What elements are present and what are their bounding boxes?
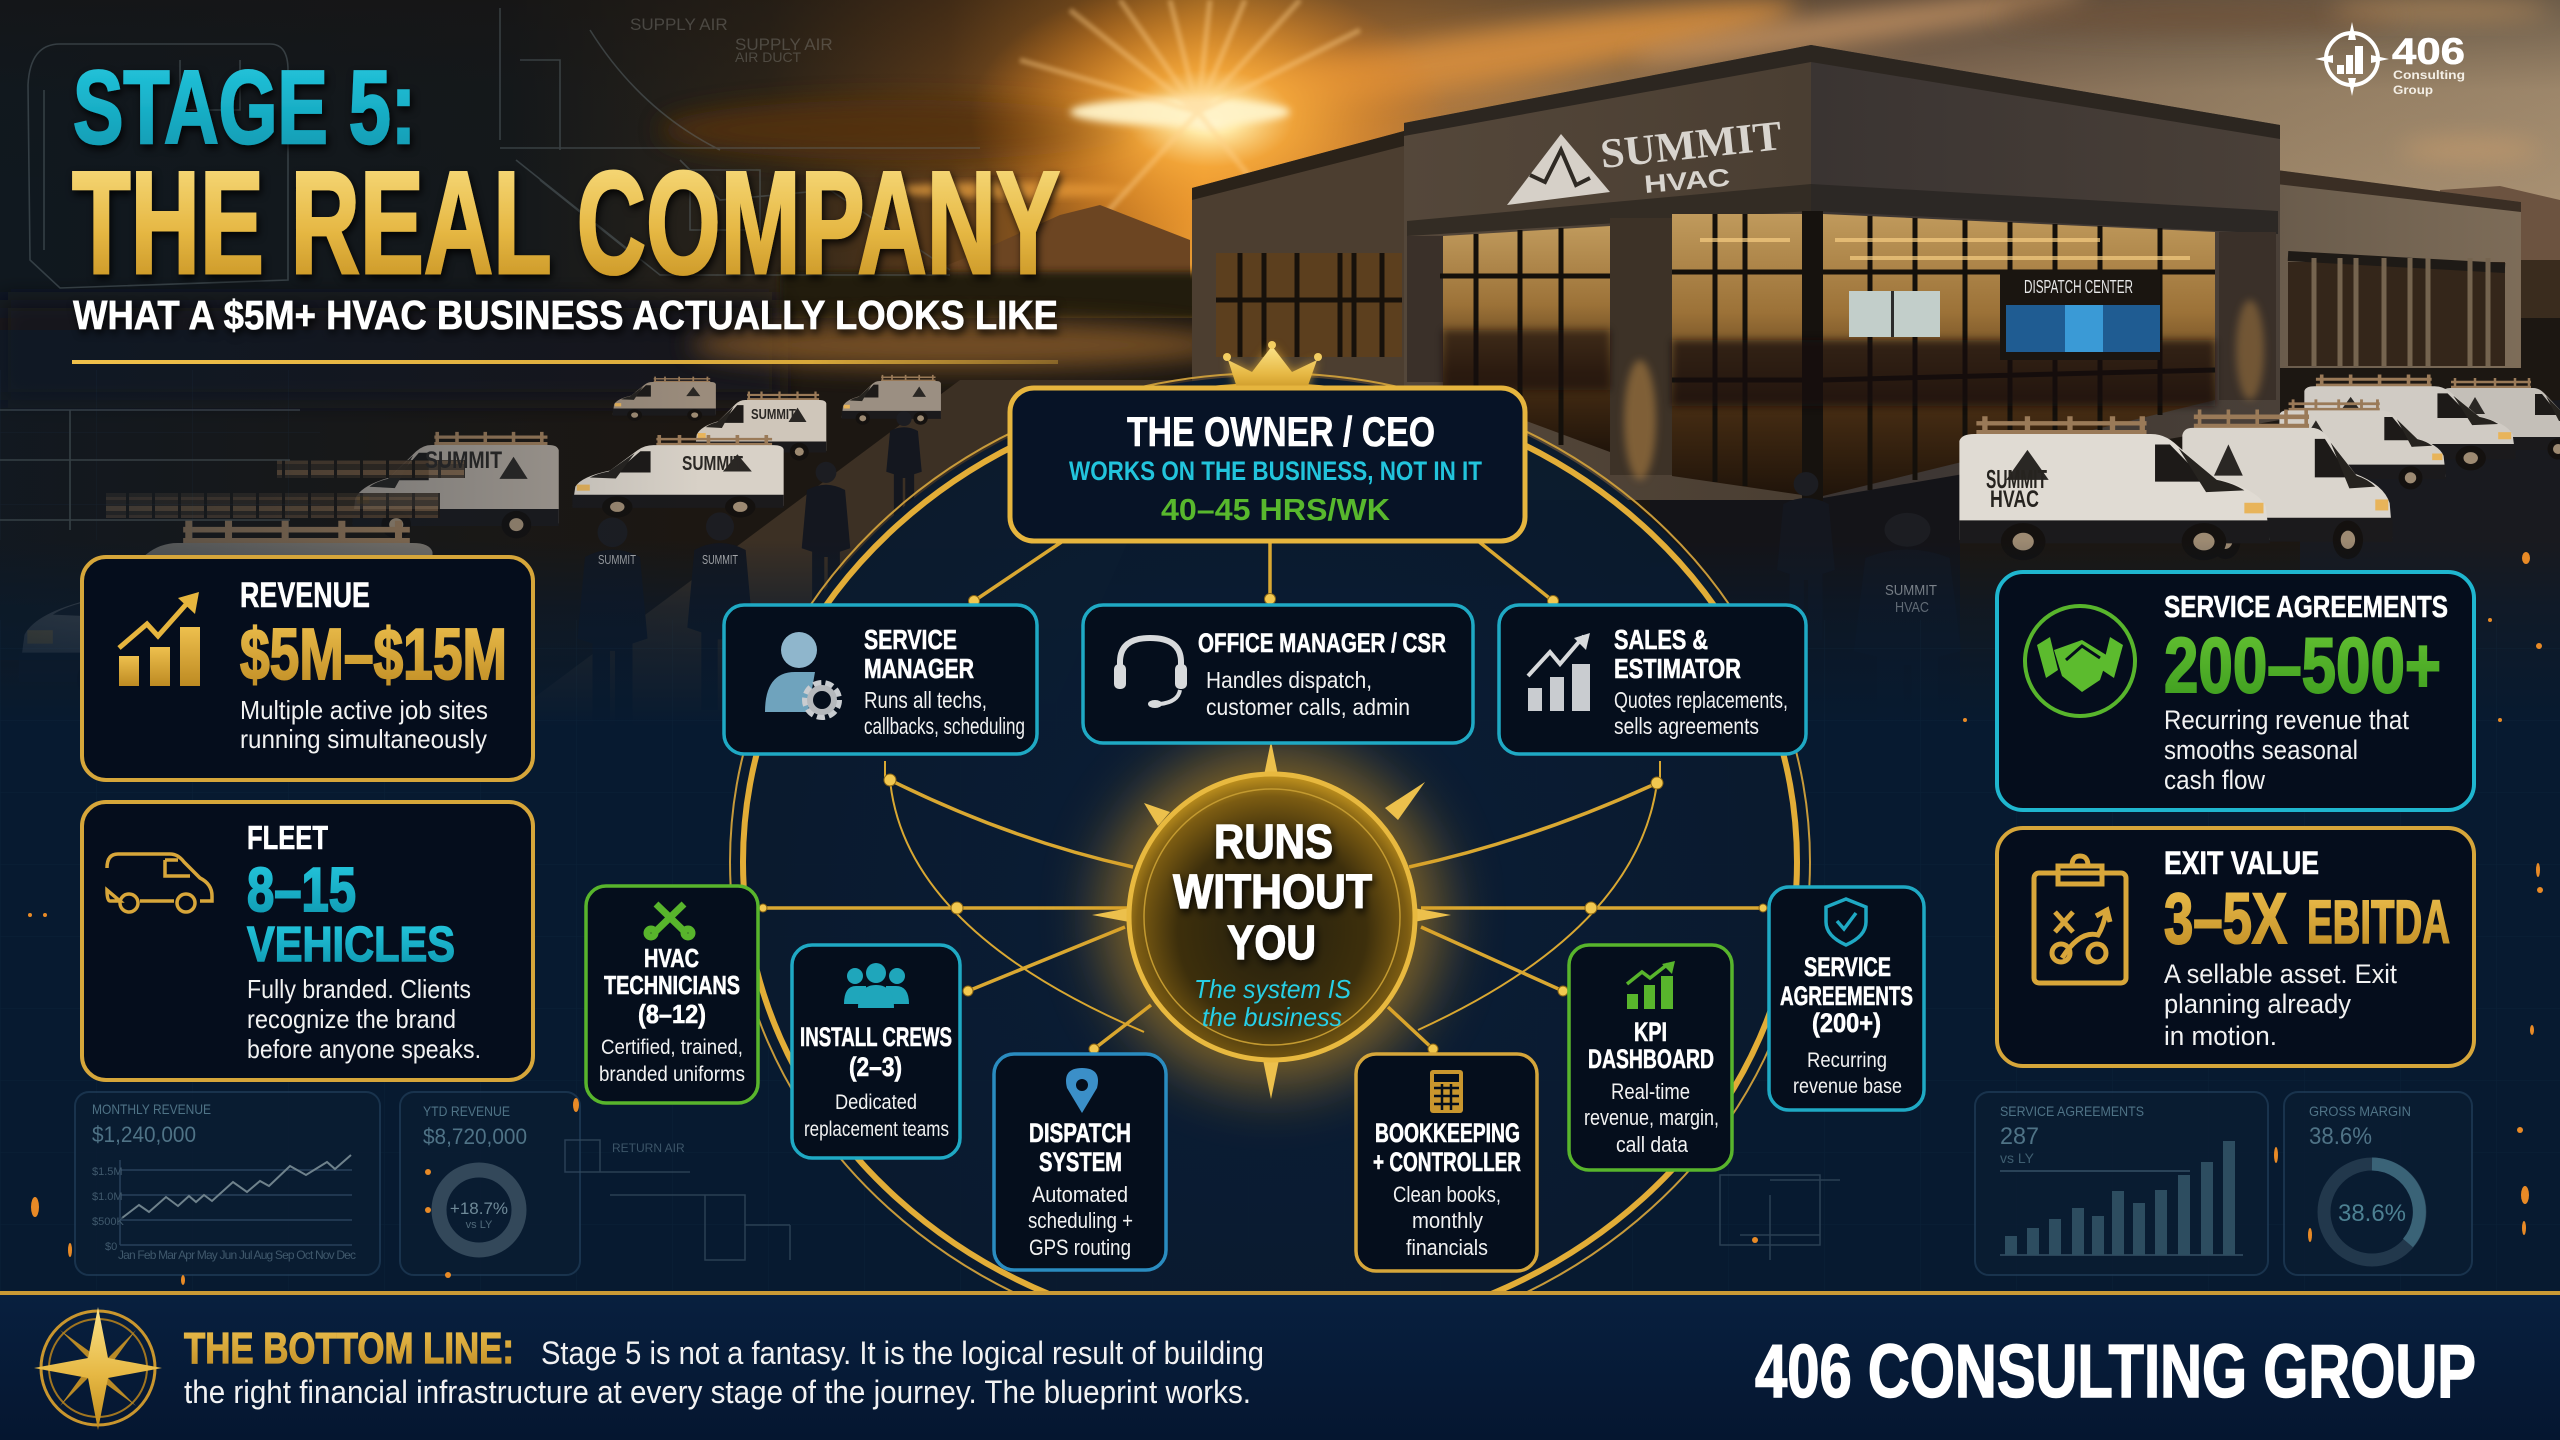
icon: wrenches (647, 904, 692, 937)
dashboard: gross margin: GROSS MARGIN (2309, 1103, 2411, 1119)
office screens (1849, 270, 2160, 360)
icon: van (107, 854, 212, 912)
panel: exit value: in motion. (2164, 1021, 2277, 1051)
node: install crews: Dedicated (835, 1091, 917, 1114)
panel: owner / CEO: 40–45 HRS/WK (1161, 492, 1391, 527)
node: install crews: (2–3) (849, 1052, 902, 1082)
panel: service agreements stat: smooths seasonal (2164, 735, 2358, 765)
title rule (72, 360, 1058, 364)
node: bookkeeping and controller: BOOKKEEPING (1375, 1118, 1520, 1148)
building sign: SUMMIT (1598, 113, 1784, 178)
dashboard: YTD revenue: YTD REVENUE (423, 1103, 510, 1119)
dashboard: monthly revenue: $500K (92, 1216, 124, 1228)
blueprint background details: SUPPLY AIR (630, 15, 728, 34)
staff silhouettes: SUMMIT (702, 552, 738, 567)
icon: crown (1223, 341, 1322, 397)
node: office manager: Handles dispatch, (1206, 667, 1372, 693)
node: install crews (792, 945, 960, 1158)
dashboard: YTD revenue: vs LY (466, 1219, 493, 1231)
central hub: runs without you: the business (1202, 1002, 1342, 1032)
van lettering: SUMMIT (682, 453, 743, 475)
node: service manager: SERVICE (864, 624, 957, 655)
staff silhouettes (578, 411, 1961, 750)
mountains and tree line (780, 186, 2560, 380)
ring: central org chart (730, 373, 1810, 1351)
node: service manager: callbacks, scheduling (864, 713, 1025, 739)
node: bookkeeping and controller (1356, 1054, 1537, 1271)
dashboard: monthly revenue: $1.0M (92, 1191, 123, 1203)
panel: owner / CEO (1010, 341, 1525, 541)
icon: person with gear (765, 632, 837, 715)
building sign (1507, 113, 1784, 205)
hub connector lines (763, 541, 1763, 1049)
supply air diagram (1720, 1175, 1840, 1260)
panel: exit value: EXIT VALUE (2164, 845, 2319, 881)
bottom line text: THE BOTTOM LINE: (184, 1324, 514, 1373)
central hub: runs without you (1092, 741, 1451, 1099)
building sign: HVAC (1643, 164, 1731, 199)
icon: crew (844, 963, 909, 1008)
footer band (0, 1291, 2560, 1430)
dashboard: YTD revenue (400, 1092, 580, 1275)
panel: exit value (1997, 828, 2474, 1066)
main block faces (1404, 45, 1811, 500)
hub text: RUNS (1214, 816, 1333, 869)
icon: KPI bars (1627, 961, 1675, 1009)
return air diagram (565, 1140, 790, 1260)
node: sales and estimator: SALES & (1614, 624, 1708, 655)
node: bookkeeping and controller: Clean books, (1393, 1182, 1501, 1207)
panel: exit value: A sellable asset. Exit (2164, 959, 2397, 989)
panel: revenue: Multiple active job sites (240, 695, 488, 725)
staff silhouettes: SUMMIT (598, 552, 636, 567)
logo: 406 consulting group (2315, 22, 2465, 97)
panel: fleet (82, 802, 533, 1080)
bottom-right faint dashboards (1720, 1092, 2472, 1275)
staff silhouettes: SUMMIT (1885, 582, 1937, 599)
dashboard: monthly revenue: $1.5M (92, 1166, 123, 1178)
node: sales and estimator: Quotes replacements, (1614, 687, 1788, 713)
title: stage 5: STAGE 5: (73, 50, 416, 166)
dashboard: gross margin: 38.6% (2309, 1123, 2372, 1150)
panel: revenue: running simultaneously (240, 724, 487, 754)
node: service agreements: SERVICE (1804, 952, 1891, 982)
node: service manager (724, 605, 1037, 754)
node: bookkeeping and controller: financials (1406, 1235, 1488, 1260)
staff silhouettes: HVAC (1895, 599, 1929, 616)
icon: handshake (2025, 606, 2135, 716)
panel: service agreements stat: SERVICE AGREEMENTS (2164, 589, 2448, 624)
node: service agreements (1769, 887, 1924, 1110)
panel: exit value: EBITDA (2307, 888, 2450, 956)
node: bookkeeping and controller: + CONTROLLER (1373, 1147, 1521, 1177)
node: office manager: customer calls, admin (1206, 694, 1410, 720)
node: sales and estimator: ESTIMATOR (1614, 653, 1741, 684)
fleet vans: left lot: SUMMIT (425, 447, 502, 474)
panel: owner / CEO: WORKS ON THE BUSINESS, NOT IN IT (1069, 456, 1482, 486)
panel: fleet: 8–15 (247, 856, 356, 925)
dashboard: monthly revenue: MONTHLY REVENUE (92, 1101, 211, 1117)
panel: service agreements stat: Recurring revenue that (2164, 705, 2409, 735)
panel: fleet: FLEET (247, 819, 328, 856)
node: KPI dashboard: call data (1616, 1132, 1689, 1157)
fleet vans: left lot (19, 375, 941, 703)
panel: fleet: VEHICLES (247, 918, 455, 972)
node: KPI dashboard: Real-time (1611, 1079, 1690, 1104)
connector dots (759, 594, 1767, 1054)
node: dispatch system: scheduling + (1028, 1208, 1133, 1233)
dashboard: service agreements: vs LY (2000, 1150, 2035, 1166)
blueprint background details: AIR DUCT (735, 49, 802, 65)
bottom-left faint dashboards: RETURN AIR (612, 1141, 685, 1155)
dashboard: service agreements: 287 (2000, 1123, 2039, 1150)
dashboard: YTD revenue: +18.7% (450, 1199, 508, 1218)
dashboard: YTD revenue: $8,720,000 (423, 1124, 527, 1149)
node: install crews: INSTALL CREWS (800, 1022, 952, 1052)
node: service manager: Runs all techs, (864, 687, 987, 713)
left wing (1192, 131, 1404, 392)
panel: revenue (82, 557, 533, 780)
panel: fleet: Fully branded. Clients (247, 974, 471, 1004)
dashboard: gross margin: 38.6% (2338, 1200, 2406, 1227)
node: office manager (1083, 605, 1473, 743)
node: KPI dashboard: DASHBOARD (1588, 1044, 1714, 1074)
icon: clipboard play (2034, 856, 2126, 983)
ember sparks (28, 552, 2543, 1285)
footer mask under ring (0, 1293, 2560, 1440)
stone pillars (1407, 218, 2276, 480)
dashboard: service agreements: SERVICE AGREEMENTS (2000, 1103, 2144, 1119)
node: HVAC technicians: Certified, trained, (601, 1036, 743, 1059)
fleet vans: left lot: SUMMIT (751, 406, 796, 423)
title block (72, 50, 1060, 364)
node: KPI dashboard: KPI (1634, 1017, 1667, 1047)
panel: owner / CEO: THE OWNER / CEO (1127, 408, 1435, 455)
node: sales and estimator (1499, 605, 1806, 754)
node: HVAC technicians (586, 886, 758, 1103)
bottom line text: the right financial infrastructure at every stage of the journey. The blueprint works. (184, 1374, 1251, 1410)
panel: fleet: recognize the brand (247, 1004, 456, 1034)
node: service manager: MANAGER (864, 653, 974, 684)
panel: revenue: $5M–$15M (240, 615, 507, 695)
dashboard: monthly revenue: $1,240,000 (92, 1122, 196, 1147)
bottom line text: Stage 5 is not a fantasy. It is the logical result of building (541, 1335, 1264, 1371)
logo mark (2315, 22, 2389, 96)
roof racks (106, 460, 465, 518)
hub text: YOU (1227, 917, 1316, 970)
node: HVAC technicians: (8–12) (638, 999, 706, 1029)
dashboard: monthly revenue: Jan Feb Mar Apr May Jun Jul Aug Sep Oct Nov Dec (118, 1248, 356, 1262)
office screens: DISPATCH CENTER (2024, 277, 2133, 297)
ground (0, 300, 2560, 738)
node: bookkeeping and controller: monthly (1412, 1208, 1483, 1233)
subtitle: WHAT A $5M+ HVAC BUSINESS ACTUALLY LOOKS LIKE (73, 292, 1058, 338)
panel: service agreements stat (1997, 572, 2474, 810)
node: service agreements: (200+) (1812, 1008, 1881, 1038)
central hub: runs without you: The system IS (1194, 974, 1352, 1004)
title: the real company: THE REAL COMPANY (72, 141, 1060, 304)
node: service agreements: revenue base (1793, 1075, 1902, 1098)
icon: revenue chart (119, 592, 200, 686)
node: HVAC technicians: HVAC (644, 943, 699, 973)
right wing (2276, 170, 2521, 368)
node: service agreements: Recurring (1807, 1049, 1887, 1072)
node: HVAC technicians: TECHNICIANS (604, 970, 740, 1000)
fleet vans: right lot: SUMMIT (1986, 464, 2047, 494)
icon: footer compass (34, 1307, 162, 1430)
panel: exit value: planning already (2164, 989, 2351, 1019)
icon: shield (1826, 899, 1866, 945)
logo: 406 consulting group: Consulting (2393, 68, 2465, 82)
hub compass points (1092, 741, 1451, 1099)
node: KPI dashboard: revenue, margin, (1584, 1105, 1719, 1130)
panel: revenue: REVENUE (240, 576, 370, 615)
node: sales and estimator: sells agreements (1614, 713, 1759, 739)
node: service agreements: AGREEMENTS (1780, 981, 1913, 1011)
hub text (1173, 816, 1372, 970)
icon: map pin (1066, 1068, 1098, 1113)
panel: service agreements stat: 200–500+ (2164, 621, 2441, 709)
node: dispatch system: SYSTEM (1039, 1147, 1122, 1177)
dashboard: service agreements (1975, 1092, 2268, 1275)
icon: calculator (1430, 1070, 1463, 1113)
node: HVAC technicians: branded uniforms (599, 1063, 745, 1086)
panel: service agreements stat: cash flow (2164, 765, 2265, 795)
Summit HVAC building (1192, 45, 2521, 501)
node: dispatch system: GPS routing (1029, 1235, 1131, 1260)
node: KPI dashboard (1569, 945, 1732, 1170)
dashboard: gross margin (2284, 1092, 2472, 1275)
node: install crews: replacement teams (804, 1118, 949, 1141)
hub text: WITHOUT (1173, 866, 1372, 919)
panel: exit value: 3–5X (2164, 880, 2287, 959)
bottom line text (184, 1324, 1264, 1410)
fleet vans: right lot (1959, 375, 2560, 560)
sunset sky (0, 0, 2560, 420)
logo: 406 consulting group: 406 (2392, 31, 2465, 72)
dashboard: monthly revenue (75, 1092, 380, 1275)
blueprint background details: SUPPLY AIR (735, 35, 833, 54)
node: dispatch system (994, 1054, 1166, 1270)
panel: fleet: before anyone speaks. (247, 1034, 481, 1064)
node: office manager: OFFICE MANAGER / CSR (1198, 628, 1446, 658)
icon: headset (1114, 638, 1187, 708)
fleet vans: right lot: HVAC (1990, 486, 2039, 513)
logo: 406 consulting group: Group (2393, 83, 2433, 97)
icon: sales chart (1528, 633, 1590, 711)
node: dispatch system: Automated (1032, 1182, 1128, 1207)
glass walls (1440, 211, 2215, 501)
dashboard: monthly revenue: $0 (105, 1241, 117, 1253)
bottom-left faint dashboards (75, 1092, 790, 1275)
node: dispatch system: DISPATCH (1029, 1118, 1131, 1148)
